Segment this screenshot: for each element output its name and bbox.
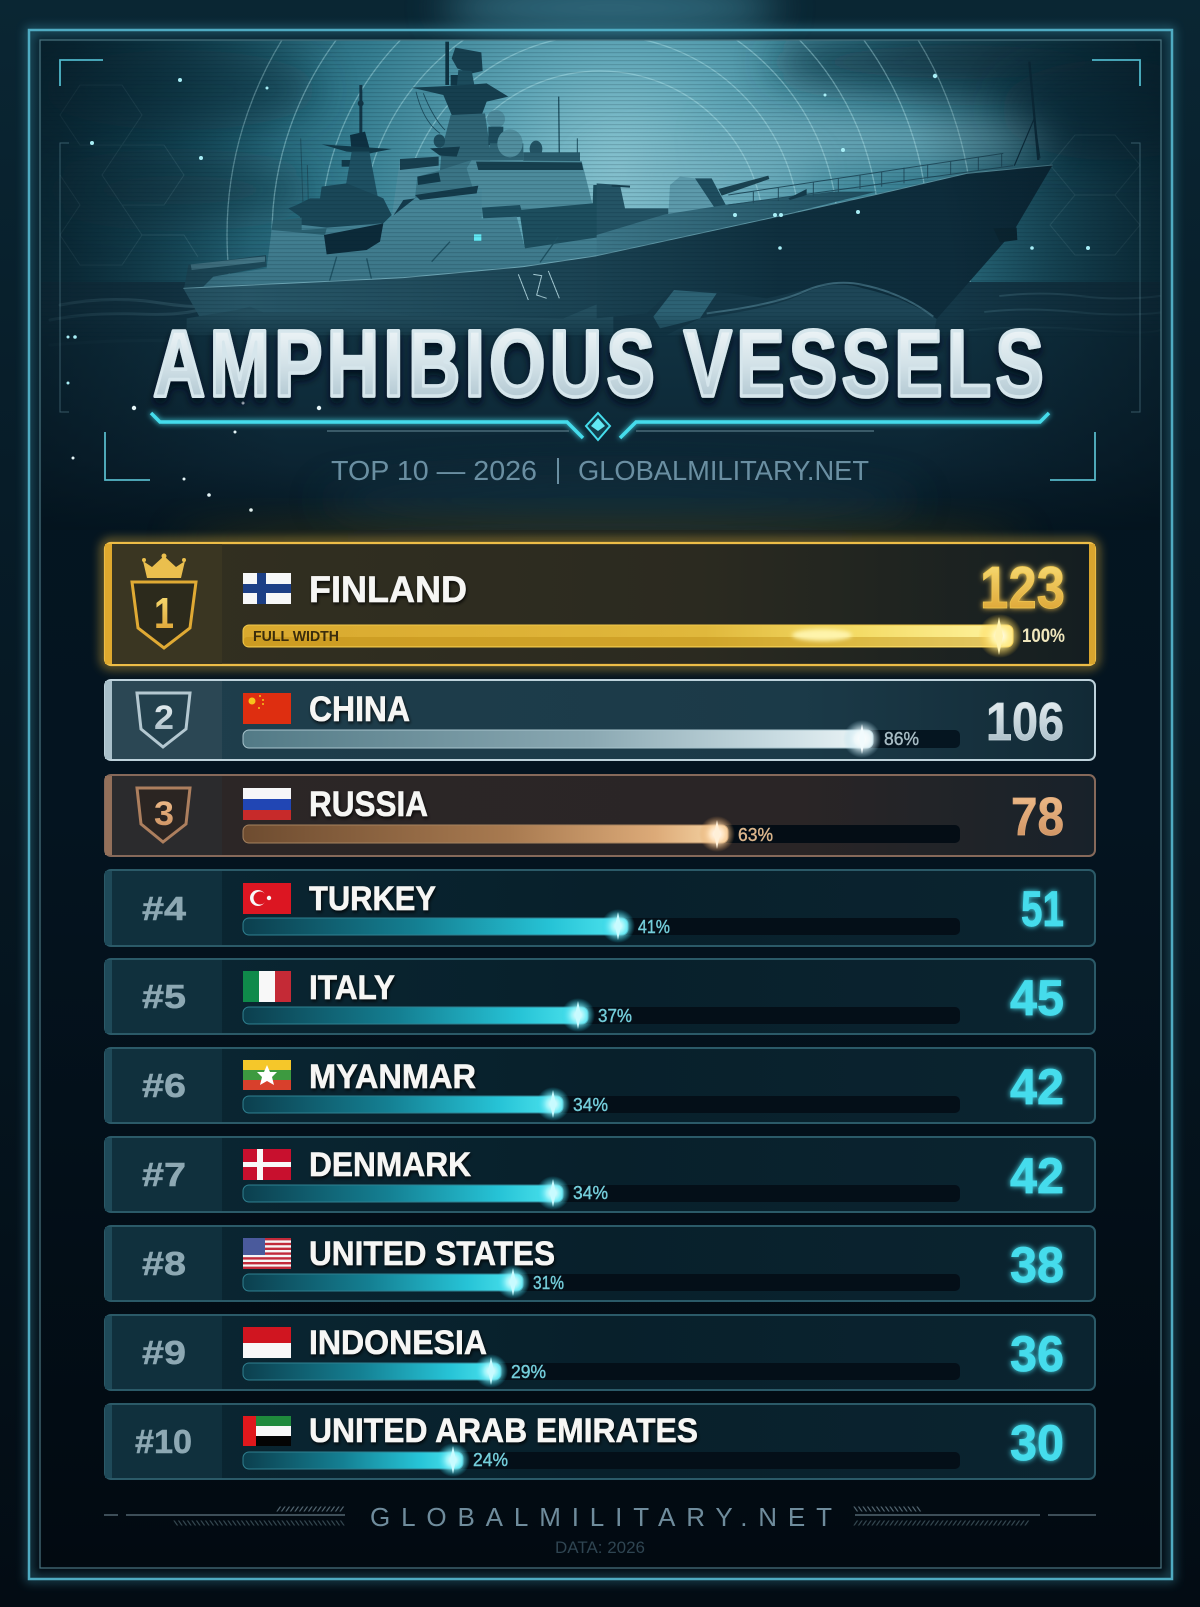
murky glow	[362, 478, 878, 527]
country name: FINLAND	[309, 569, 467, 610]
rank panel 2: 2	[154, 699, 174, 737]
value: 42	[1010, 1148, 1064, 1204]
rank panel 8	[105, 1227, 222, 1300]
flag: Denmark	[243, 1149, 291, 1180]
sea	[114, 282, 1118, 416]
flag: United States	[243, 1238, 291, 1269]
row 1: Finland	[104, 542, 1096, 666]
country name: DENMARK	[309, 1146, 471, 1184]
rank panel 7	[105, 1138, 222, 1211]
ship fore section	[597, 62, 1053, 335]
icon: bronze shield 3	[137, 788, 190, 842]
bridge block	[466, 160, 597, 248]
country name: RUSSIA	[309, 785, 428, 824]
row 4: Turkey	[105, 870, 1095, 946]
value: 36	[1010, 1326, 1064, 1382]
percent: 24%	[473, 1450, 508, 1470]
flag: Italy	[243, 971, 291, 1002]
ship aft section	[183, 42, 613, 335]
footer data year: DATA: 2026	[555, 1538, 645, 1557]
percent: 34%	[573, 1095, 608, 1115]
hero vignette	[40, 40, 1161, 530]
value: 51	[1021, 881, 1064, 937]
country name: UNITED ARAB EMIRATES	[309, 1412, 698, 1450]
rank panel 4: #4	[142, 890, 187, 927]
country name: ITALY	[309, 969, 395, 1007]
percent: 34%	[573, 1183, 608, 1203]
value: 38	[1010, 1237, 1064, 1293]
rank panel 6: #6	[142, 1067, 186, 1104]
row 5: Italy	[105, 959, 1095, 1034]
country name: TURKEY	[309, 880, 436, 918]
percent: 100%	[1022, 626, 1065, 647]
rank panel 3: 3	[154, 795, 174, 833]
flag: Finland	[243, 573, 291, 604]
percent: 41%	[638, 917, 670, 937]
value: 42	[1010, 1059, 1064, 1115]
fore deck band	[597, 192, 877, 256]
rank panel 8: #8	[142, 1245, 186, 1282]
railing	[728, 153, 1013, 205]
icon: gold shield 1	[132, 582, 196, 648]
rank panel 10: #10	[135, 1423, 192, 1460]
subtitle: TOP 10 — 2026	[331, 455, 537, 486]
rank panel 10	[105, 1405, 222, 1478]
bar	[243, 1087, 960, 1121]
bar: FULL WIDTH	[253, 629, 339, 645]
aft hull	[183, 253, 613, 318]
anchor	[1004, 228, 1018, 242]
aft antennas	[300, 96, 578, 202]
rear mast	[322, 85, 392, 200]
bow wave	[682, 284, 936, 328]
bar	[243, 1443, 960, 1477]
country name: CHINA	[309, 690, 410, 729]
country name: UNITED STATES	[309, 1235, 555, 1273]
row 9: Indonesia	[105, 1315, 1095, 1390]
percent: 63%	[738, 825, 773, 845]
bar	[243, 1176, 960, 1210]
flag: Myanmar	[243, 1060, 291, 1090]
bar	[243, 1265, 960, 1299]
rear gun mount	[597, 183, 668, 239]
row 3: Russia	[105, 775, 1095, 856]
radar arcs	[226, 40, 971, 282]
footer ornament left	[104, 1509, 345, 1523]
bar	[243, 998, 960, 1032]
hud corner brackets	[60, 60, 1140, 480]
white sparks	[72, 402, 321, 512]
subtitle: GLOBALMILITARY.NET	[578, 455, 869, 486]
rank panel 7: #7	[142, 1156, 186, 1193]
rank panel 5	[105, 960, 222, 1033]
rank panel 1: 1	[154, 589, 174, 638]
hero: warship scene	[40, 40, 1160, 530]
rank panel 6	[105, 1049, 222, 1122]
flag: Russia	[243, 788, 291, 820]
country name: INDONESIA	[309, 1324, 487, 1362]
percent: 37%	[598, 1006, 632, 1026]
hex overlay	[60, 85, 1140, 265]
row 2: China	[105, 680, 1095, 760]
percent: 29%	[511, 1362, 546, 1382]
top light beam	[440, 0, 780, 34]
row 8: United States	[105, 1226, 1095, 1301]
country name: MYANMAR	[309, 1058, 476, 1096]
bar	[243, 614, 1022, 658]
aft wake	[187, 304, 613, 335]
rank panel 3	[105, 776, 222, 855]
bar	[243, 1354, 960, 1388]
row 7: Denmark	[105, 1137, 1095, 1212]
fore mast	[1014, 62, 1040, 166]
hull number	[518, 271, 559, 300]
row 6: Myanmar	[105, 1048, 1095, 1123]
footer site name: GLOBALMILITARY.NET	[370, 1502, 832, 1532]
flag: China	[243, 693, 291, 724]
footer ornament right	[855, 1509, 1096, 1523]
icon: crown	[142, 554, 186, 578]
main superstructure	[184, 186, 613, 288]
flag: UAE	[243, 1416, 291, 1446]
bar	[243, 720, 960, 758]
bar	[243, 816, 960, 852]
rank panel 1	[105, 544, 1095, 664]
hero dark fade	[40, 312, 1161, 532]
particles	[66, 74, 1090, 385]
title underline with diamond	[151, 413, 1049, 440]
rear deck clutter	[288, 183, 392, 232]
flag: Turkey	[243, 883, 291, 914]
rank panel 9	[105, 1316, 222, 1389]
title: AMPHIBIOUS VESSELS	[153, 310, 1044, 416]
value: 30	[1010, 1415, 1064, 1471]
value: 123	[980, 555, 1065, 621]
bar	[243, 909, 960, 943]
main gun	[668, 176, 769, 215]
icon: silver shield 2	[137, 693, 190, 747]
percent: 31%	[533, 1273, 564, 1293]
main mast	[412, 42, 580, 178]
fore hull	[597, 165, 1053, 319]
amber glow above first row	[170, 530, 1030, 546]
rank panel 4	[105, 871, 222, 945]
scanlines	[184, 40, 1052, 325]
percent: 86%	[884, 729, 919, 749]
rank panel 2	[105, 681, 222, 759]
value: 45	[1010, 970, 1064, 1026]
aft tall block	[392, 156, 472, 216]
rank panel 5: #5	[142, 978, 186, 1015]
rank panel 9: #9	[142, 1334, 186, 1371]
subtitle	[331, 455, 869, 486]
row 10: United Arab Emirates	[105, 1404, 1095, 1479]
value: 78	[1011, 787, 1064, 847]
flag: Indonesia	[243, 1327, 291, 1358]
value: 106	[986, 692, 1064, 752]
